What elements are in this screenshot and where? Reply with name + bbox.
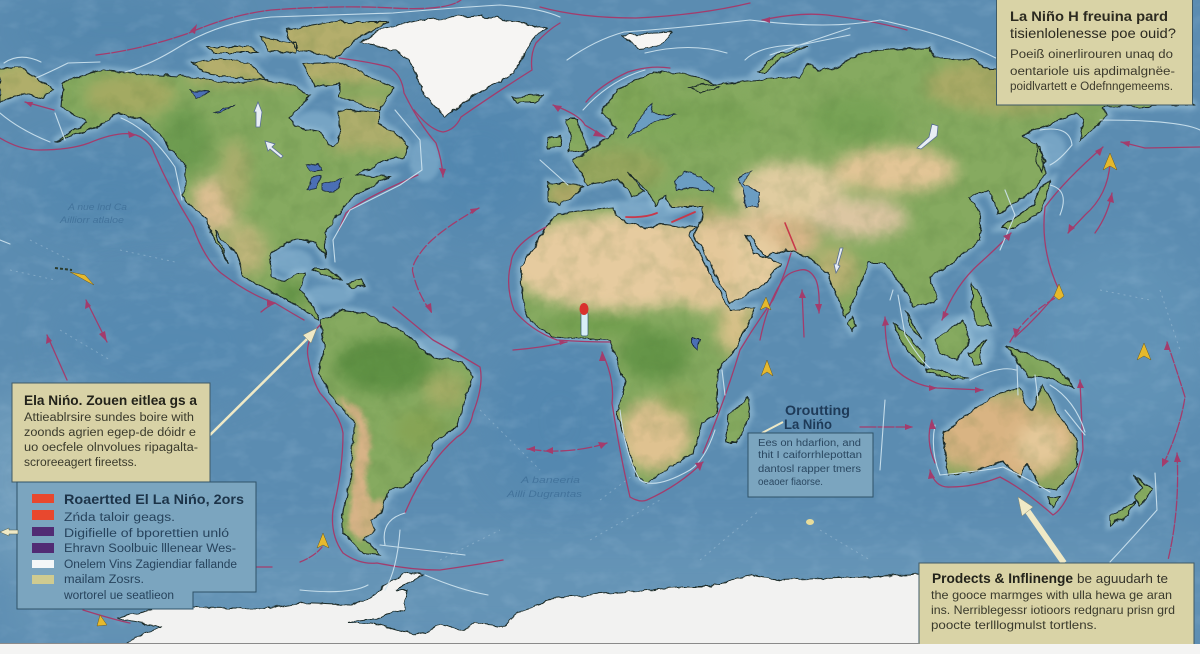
callout: center text box: oeaoer fiaorse.: [758, 477, 823, 488]
legend entries: Onelem Vins Zagiendiar fallande: [64, 559, 237, 571]
callout: products and influence bottom right: be aguudarh te: [1077, 572, 1168, 586]
callout: el nino left: uo oecfele olnvolues ripagalta-: [24, 442, 198, 454]
antarctica: [117, 573, 925, 650]
callout: center text box: dantosl rapper tmers: [758, 464, 861, 475]
label: la nino center: [784, 403, 850, 432]
greenland: [361, 15, 546, 117]
leader line: la nino label to madagascar: [762, 422, 783, 433]
callout: la nina top right: poidlvartett e Odefnngemeems.: [1010, 81, 1173, 93]
inland seas and lakes: [190, 90, 760, 350]
faint label: north pacific: A nue lnd Ca: [67, 202, 127, 212]
legend panel: [17, 482, 256, 609]
label: la nino center: Oroutting: [785, 403, 850, 418]
legend entries: Ehravn Soolbuic lllenear Wes-: [64, 543, 236, 555]
faint label: south atlantic: A baneeria: [520, 475, 580, 485]
callout: products and influence bottom right: ins. Nerriblegessr iotioors redgnaru prisn grd: [931, 603, 1175, 617]
leader line: left callout to panama: [210, 328, 317, 435]
callout: la nina top right: tisienlolenesse poe ouid?: [1010, 25, 1176, 41]
legend entries: wortorel ue seatlieon: [63, 590, 174, 602]
callout: la nina top right: oentariole uis apdimalgnëe-: [1010, 66, 1175, 78]
legend entries: mailam Zosrs.: [64, 574, 144, 586]
legend entries: Digifielle of bporettien unló: [64, 528, 229, 540]
legend entries: Zńda taloir geags.: [64, 512, 175, 524]
callout: products and influence bottom right: the gooce marmges with ulla hewa ge aran: [931, 588, 1172, 602]
left edge arrow: [0, 528, 18, 536]
callout: la nina top right: [996, 0, 1192, 105]
callout: center text box: [748, 433, 873, 497]
callout: el nino left: scroreeagert fireetss.: [24, 457, 137, 469]
faint label: north pacific: [59, 202, 127, 225]
callout: el nino left: Ela Nińo. Zouen eitlea gs a: [24, 392, 197, 408]
legend panel: Roaertted El La Nińo, 2ors: [64, 491, 244, 507]
callout: la nina top right: La Niño H freuina pard: [1010, 8, 1168, 24]
callout: la nina top right: Poeiß oinerlirouren unaq do: [1010, 49, 1173, 61]
white arrow: india: [834, 248, 843, 273]
callout: products and influence bottom right: poocte terlllogmulst tortlens.: [931, 618, 1097, 632]
callout: el nino left: [12, 383, 210, 482]
white arrow: north america: [254, 102, 262, 127]
faint label: south atlantic: Ailli Dugrantas: [506, 489, 583, 499]
callout: center text box: Ees on hdarfion, and: [758, 438, 861, 449]
arrowheads: [25, 17, 1181, 479]
white arrow: central canada: [265, 141, 283, 158]
light shallow seas: [273, 111, 1066, 375]
legend swatches: [32, 494, 54, 584]
red marker on gulf of guinea: [580, 303, 588, 336]
faint label: south atlantic: [506, 475, 583, 499]
label: la nino center: La Nińo: [784, 417, 832, 432]
callout: el nino left: zoonds agrien egep-de dóidr e: [24, 427, 196, 439]
callout: products and influence bottom right: Prodects & Inflinenge: [932, 571, 1073, 586]
bottom page strip: [0, 643, 1200, 654]
callout: el nino left: Attieablrsire sundes boire with: [24, 412, 194, 424]
callout: products and influence bottom right: [919, 563, 1194, 646]
faint label: north pacific: Ailliorr atlaloe: [59, 215, 124, 225]
ocean surface streaks: [10, 240, 1180, 560]
callout: center text box: thit I caiforrhlepottan: [758, 450, 862, 461]
svalbard: [622, 32, 672, 48]
leader line: bottom callout to australia: [1018, 497, 1064, 563]
legend entries: [63, 512, 237, 602]
white arrow: siberia: [917, 124, 938, 149]
yellow markers: [55, 153, 1151, 626]
